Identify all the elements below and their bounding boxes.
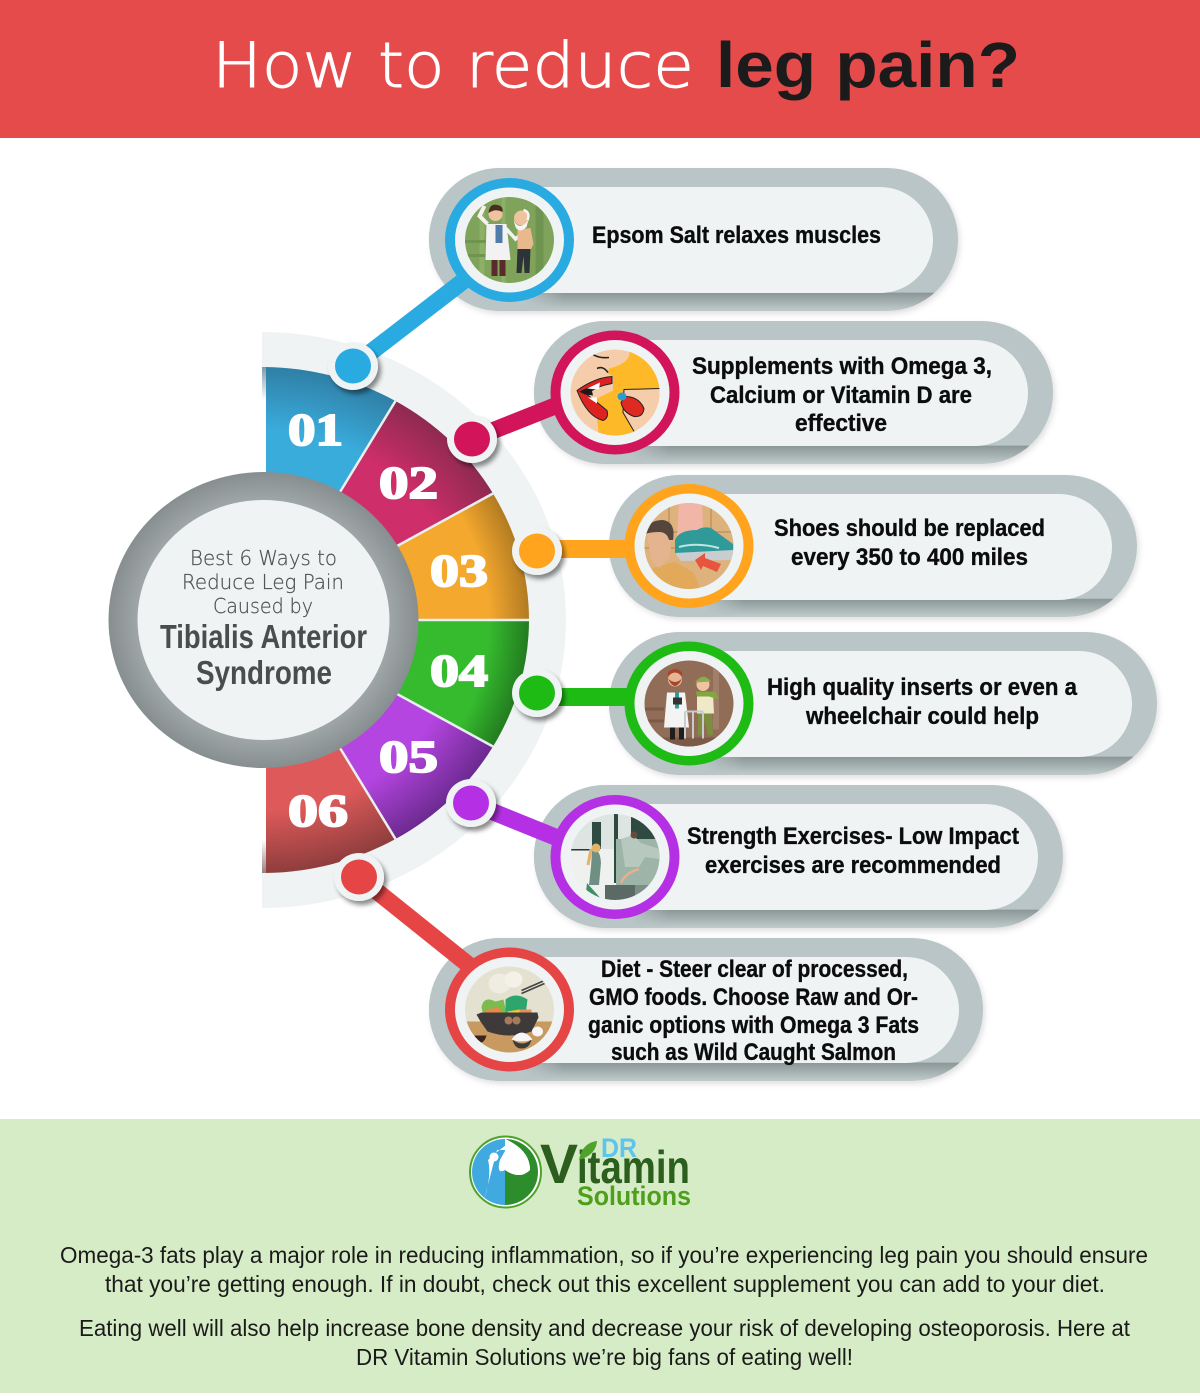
text: effective bbox=[795, 410, 887, 437]
icon: doctor examining patient bbox=[464, 196, 554, 284]
sector 05 bbox=[262, 620, 493, 839]
logo: DR bbox=[601, 1133, 637, 1163]
connector line 4 bbox=[537, 688, 640, 706]
connector line 3 bbox=[537, 540, 640, 558]
icon: man and worn shoe bbox=[644, 502, 734, 590]
footer panel bbox=[0, 1119, 1200, 1393]
icon: taking a pill bbox=[570, 348, 660, 436]
hub text: Syndrome bbox=[196, 654, 332, 691]
text: such as Wild Caught Salmon bbox=[611, 1039, 896, 1066]
center hub bbox=[108, 472, 418, 768]
semicircle outer band bbox=[262, 332, 566, 908]
pill 6: diet bbox=[359, 877, 983, 1081]
text bbox=[767, 674, 1078, 730]
pill 1: Epsom salt bbox=[353, 168, 958, 366]
icon: low impact gym exercise bbox=[570, 813, 661, 901]
footer paragraph 1: Omega-3 fats play a major role in reducing inflammation, so if you’re experiencing leg pain you should ensure bbox=[60, 1242, 1148, 1268]
text: Epsom Salt relaxes muscles bbox=[592, 222, 881, 249]
text bbox=[774, 515, 1045, 571]
footer paragraph 2 bbox=[79, 1315, 1130, 1370]
text: Shoes should be replaced bbox=[774, 515, 1045, 542]
connector nodes bbox=[328, 342, 562, 901]
footer paragraph 1 bbox=[60, 1242, 1148, 1297]
sector 02 bbox=[262, 401, 493, 620]
icon: doctor and elderly man with walker bbox=[644, 660, 734, 748]
text: every 350 to 400 miles bbox=[791, 544, 1028, 571]
connector line 5 bbox=[471, 803, 570, 843]
text: Calcium or Vitamin D are bbox=[710, 382, 972, 409]
sector numbers: 06 bbox=[288, 785, 348, 836]
title: leg pain? bbox=[716, 29, 1020, 101]
logo: itamin bbox=[577, 1141, 690, 1193]
text: Supplements with Omega 3, bbox=[692, 353, 992, 380]
connector line 2 bbox=[472, 402, 565, 439]
sector 01 bbox=[265, 367, 396, 620]
pill 5: strength exercises bbox=[471, 785, 1063, 928]
hub text: Best 6 Ways to bbox=[190, 546, 337, 570]
text: wheelchair could help bbox=[805, 703, 1039, 730]
sector wheel bbox=[262, 367, 529, 873]
text: Strength Exercises- Low Impact bbox=[687, 823, 1019, 850]
footer paragraph 1: that you’re getting enough. If in doubt, check out this excellent supplement you can add to your diet. bbox=[105, 1271, 1105, 1297]
hub text: Caused by bbox=[213, 594, 313, 618]
logo: V bbox=[540, 1132, 578, 1195]
text: GMO foods. Choose Raw and Or- bbox=[589, 984, 918, 1011]
text bbox=[692, 353, 992, 437]
logo: Solutions bbox=[577, 1181, 691, 1211]
logo bbox=[470, 1132, 691, 1211]
connector line 1 bbox=[353, 272, 475, 366]
hub text: Tibialis Anterior bbox=[160, 618, 367, 655]
connector line 6 bbox=[359, 877, 475, 970]
pill 4: inserts bbox=[537, 632, 1157, 775]
icon: hot pot meal bbox=[464, 966, 554, 1054]
title: How to reduce bbox=[212, 29, 694, 102]
text bbox=[687, 823, 1019, 879]
sector 03 bbox=[262, 494, 529, 620]
sector numbers: 01 bbox=[288, 404, 343, 455]
hub text: Reduce Leg Pain bbox=[182, 570, 344, 594]
footer paragraph 2: Eating well will also help increase bone density and decrease your risk of developing osteoporosis. Here at bbox=[79, 1315, 1130, 1341]
text: exercises are recommended bbox=[705, 852, 1001, 879]
sector numbers bbox=[288, 404, 488, 836]
sector numbers: 03 bbox=[430, 545, 488, 596]
text: Diet - Steer clear of processed, bbox=[601, 956, 908, 983]
sector numbers: 05 bbox=[379, 731, 438, 782]
hub text bbox=[160, 546, 367, 691]
pill 2: supplements bbox=[472, 321, 1053, 464]
header banner bbox=[0, 0, 1200, 138]
sector 04 bbox=[262, 620, 529, 746]
sector 06 bbox=[265, 620, 396, 873]
sector numbers: 02 bbox=[379, 457, 438, 508]
text: ganic options with Omega 3 Fats bbox=[588, 1012, 919, 1039]
pill 3: shoes bbox=[537, 475, 1137, 617]
footer paragraph 2: DR Vitamin Solutions we’re big fans of eating well! bbox=[356, 1344, 853, 1370]
sector numbers: 04 bbox=[430, 645, 488, 696]
text bbox=[588, 956, 919, 1066]
text: High quality inserts or even a bbox=[767, 674, 1078, 701]
